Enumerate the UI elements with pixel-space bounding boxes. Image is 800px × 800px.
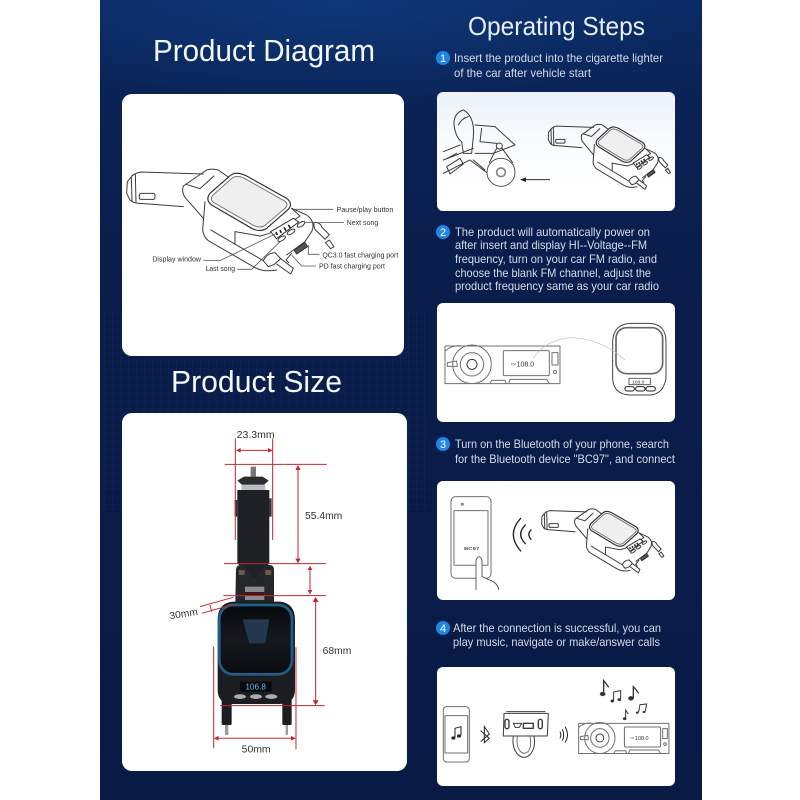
- step 1 text: [436, 51, 663, 80]
- diagram: line drawing of the transmitter with callouts: Next song: [347, 220, 378, 227]
- diagram: line drawing of the transmitter with callouts: QC3.0 fast charging port: [322, 253, 398, 260]
- diagram: line drawing of the transmitter with callouts: Pause/play button: [337, 207, 393, 214]
- arrow pointing to the socket: [520, 177, 550, 182]
- gear shift and lighter socket: [443, 110, 515, 186]
- step 2 text: [436, 225, 659, 293]
- navy background: [100, 0, 702, 800]
- phone with finger tapping BC97: [451, 497, 499, 590]
- step 1 text: Insert the product into the cigarette lighter: [454, 51, 663, 65]
- step 2 text: The product will automatically power on: [455, 225, 650, 239]
- panel: step 2 illustration: [437, 303, 675, 422]
- step 2 text: 2: [440, 227, 446, 239]
- panel: step 1 illustration: [437, 92, 675, 211]
- diagram: line drawing of the transmitter with callouts: Display window: [152, 256, 202, 263]
- title: Product Diagram: Product Diagram: [153, 33, 375, 68]
- dimension labels: 68mm: [323, 646, 351, 657]
- bluetooth wave arcs: [513, 518, 531, 551]
- step 2 text: choose the blank FM channel, adjust the: [455, 266, 651, 280]
- dimension labels: 55.4mm: [305, 511, 342, 522]
- step 2 text: product frequency same as your car radio: [455, 279, 659, 293]
- dimension labels: [169, 430, 351, 756]
- step 3 text: Turn on the Bluetooth of your phone, search: [455, 437, 669, 451]
- transmitter drawing: [548, 124, 671, 189]
- phone with finger tapping BC97: BC97: [464, 546, 480, 552]
- step 1 text: of the car after vehicle start: [454, 66, 592, 80]
- step 4 text: 4: [440, 623, 446, 635]
- plug body: [235, 467, 272, 580]
- step 4 text: [436, 621, 661, 649]
- step 3 text: 3: [440, 439, 446, 451]
- step 3 text: [436, 437, 676, 466]
- product photo with dimension lines: [169, 430, 351, 756]
- transmitter head: [218, 602, 295, 704]
- step 1 text: 1: [440, 53, 446, 65]
- step 2 text: after insert and display HI--Voltage--FM: [455, 238, 647, 252]
- step 4 text: After the connection is successful, you can: [453, 621, 661, 635]
- dimension labels: 50mm: [242, 745, 271, 756]
- transmitter front view: [533, 323, 666, 395]
- step 2 text: frequency, turn on your car FM radio, and: [455, 252, 657, 266]
- music notes: [600, 681, 647, 720]
- dimension lines: [200, 438, 327, 749]
- transmitter head: 106.8: [245, 681, 266, 691]
- car radio: [445, 345, 560, 384]
- transmitter drawing: [542, 509, 664, 573]
- title: Product Size: Product Size: [171, 364, 342, 399]
- panel: step 4 illustration: [437, 667, 675, 786]
- car radio: [579, 723, 669, 753]
- dimension labels: 23.3mm: [237, 430, 275, 441]
- diagram: line drawing of the transmitter with callouts: Last song: [206, 266, 235, 273]
- dimension labels: 30mm: [169, 607, 199, 622]
- hinge: [235, 565, 274, 603]
- sound wave arcs: [560, 727, 567, 743]
- panel: step 3 illustration: [437, 481, 675, 600]
- title: Operating Steps: Operating Steps: [468, 11, 645, 41]
- transmitter front view: 108.0: [632, 380, 645, 386]
- diagram: line drawing of the transmitter with callouts: [127, 169, 398, 274]
- bluetooth symbol: [481, 727, 489, 743]
- retractable cables: [222, 693, 292, 735]
- phone with music note: [443, 707, 469, 762]
- panel: product size: [122, 413, 407, 771]
- diagram: line drawing of the transmitter with callouts: PD fast charging port: [319, 263, 385, 270]
- transmitter end view: [503, 712, 548, 757]
- step 3 text: for the Bluetooth device "BC97", and connect: [455, 452, 676, 466]
- panel: product diagram: [122, 94, 404, 356]
- step 4 text: play music, navigate or make/answer calls: [453, 635, 660, 649]
